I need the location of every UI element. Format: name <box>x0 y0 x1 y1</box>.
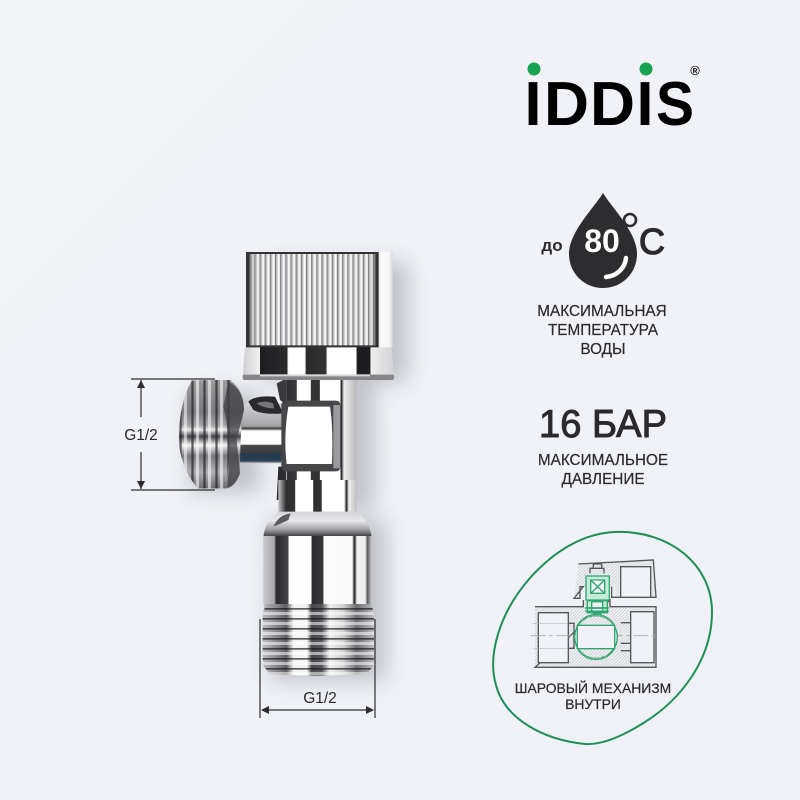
centre axis lines <box>531 634 658 637</box>
brand logo: I <box>524 70 542 139</box>
collar <box>243 347 394 377</box>
product photo: angle valve <box>179 252 394 676</box>
brand logo: D <box>544 70 589 139</box>
icon: water drop 80°C <box>541 193 665 288</box>
callout text: ШАРОВЫЙ МЕХАНИЗМ <box>515 679 671 696</box>
brand logo: S <box>656 70 694 139</box>
cross-section diagram <box>531 560 658 667</box>
dimension: side port G1/2: G1/2 <box>124 427 158 444</box>
brand logo: ® <box>690 63 700 78</box>
side port thread <box>179 380 244 488</box>
text: max water temperature: ВОДЫ <box>580 341 626 358</box>
text: max water temperature: МАКСИМАЛЬНАЯ <box>537 303 667 320</box>
green ball and stem <box>575 576 617 658</box>
lower stem <box>278 480 357 513</box>
green outline <box>493 532 712 744</box>
ball mechanism callout <box>493 532 712 744</box>
text: max pressure <box>538 452 668 488</box>
text: max water temperature <box>537 303 667 358</box>
brand logo: D <box>590 70 635 139</box>
dimension: bottom thread G1/2 <box>260 619 375 718</box>
knurled grip <box>246 252 393 349</box>
dimension: bottom thread G1/2: G1/2 <box>303 690 337 707</box>
cylinder <box>263 536 372 605</box>
valve handle and upper body <box>179 252 394 500</box>
side port neck <box>233 403 285 463</box>
heading: 16 bar: 16 БАР <box>539 403 667 446</box>
text: max pressure: ДАВЛЕНИЕ <box>561 471 645 488</box>
body cube <box>281 401 341 471</box>
icon: water drop 80°C: C <box>639 221 665 262</box>
dimension: side port G1/2 <box>124 379 215 490</box>
text: max water temperature: ТЕМПЕРАТУРА <box>548 322 659 339</box>
text: max pressure: МАКСИМАЛЬНОЕ <box>538 452 668 469</box>
brand logo: I <box>636 70 654 139</box>
hatched housing <box>535 600 656 667</box>
shoulder <box>263 512 372 537</box>
callout text: ВНУТРИ <box>565 696 621 712</box>
icon: water drop 80°C: до <box>541 236 563 255</box>
stem <box>287 378 357 500</box>
callout text <box>515 679 671 712</box>
product shadow <box>190 262 408 680</box>
brand logo <box>524 62 700 139</box>
lower body and thread <box>263 480 374 676</box>
lower thread <box>263 604 374 676</box>
temperature block <box>537 193 667 358</box>
pressure block <box>538 403 668 488</box>
icon: water drop 80°C: 80 <box>584 223 620 259</box>
grey outlines <box>535 560 656 667</box>
